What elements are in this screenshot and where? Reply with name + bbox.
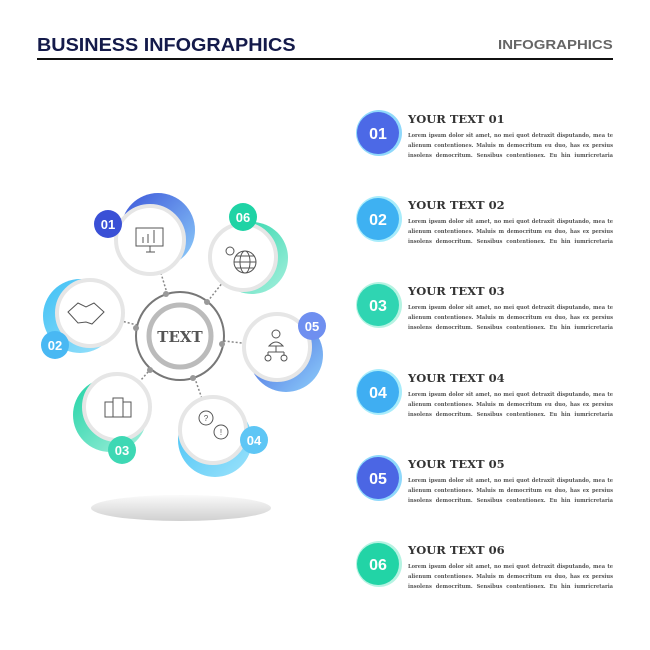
text 05: YOUR TEXT 05 xyxy=(408,457,505,471)
text 01: insolens democritum. Sensibus contentionex. Eu hin iumricretaria xyxy=(408,153,613,159)
item 1 xyxy=(94,193,195,274)
center: TEXT xyxy=(157,328,204,346)
text 02: YOUR TEXT 02 xyxy=(408,198,505,212)
text 04: YOUR TEXT 04 xyxy=(408,371,505,385)
center xyxy=(133,291,225,381)
item 2: 02 xyxy=(48,338,62,353)
text 03: YOUR TEXT 03 xyxy=(408,284,505,298)
text 01 xyxy=(408,112,613,159)
text 01: alienum contentiones. Maluis m democritum eu duo, has ex persius xyxy=(408,143,613,149)
connectors xyxy=(90,237,277,430)
text 06: YOUR TEXT 06 xyxy=(408,543,505,557)
text 05 xyxy=(408,457,613,504)
text 04 xyxy=(408,371,613,418)
item 6 xyxy=(210,203,288,294)
item 4 xyxy=(178,397,268,477)
text 04: alienum contentiones. Maluis m democritum eu duo, has ex persius xyxy=(408,402,613,408)
text 03: insolens democritum. Sensibus contentionex. Eu hin iumricretaria xyxy=(408,325,613,331)
text 02 xyxy=(408,198,613,245)
subtitle: INFOGRAPHICS xyxy=(498,37,613,52)
item 3 xyxy=(73,374,150,464)
list badges: 04 xyxy=(369,385,387,402)
text 02: Lorem ipsum dolor sit amet, no mei quot detraxit disputando, mea te xyxy=(408,219,613,225)
item 5: 05 xyxy=(305,319,319,334)
title: BUSINESS INFOGRAPHICS xyxy=(37,35,296,55)
text 01: YOUR TEXT 01 xyxy=(408,112,505,126)
item 4: 04 xyxy=(247,433,262,448)
text 05: alienum contentiones. Maluis m democritum eu duo, has ex persius xyxy=(408,488,613,494)
item 4: ? xyxy=(204,414,209,423)
item 6: 06 xyxy=(236,210,250,225)
text 01: Lorem ipsum dolor sit amet, no mei quot detraxit disputando, mea te xyxy=(408,133,613,139)
text 05: Lorem ipsum dolor sit amet, no mei quot detraxit disputando, mea te xyxy=(408,478,613,484)
text 02: alienum contentiones. Maluis m democritum eu duo, has ex persius xyxy=(408,229,613,235)
text 02: insolens democritum. Sensibus contentionex. Eu hin iumricretaria xyxy=(408,239,613,245)
list badges: 05 xyxy=(369,471,387,488)
text 06: insolens democritum. Sensibus contentionex. Eu hin iumricretaria xyxy=(408,584,613,590)
item 3: 03 xyxy=(115,443,129,458)
text 04: insolens democritum. Sensibus contentionex. Eu hin iumricretaria xyxy=(408,412,613,418)
text 05: insolens democritum. Sensibus contentionex. Eu hin iumricretaria xyxy=(408,498,613,504)
list badges: 02 xyxy=(369,212,387,229)
item 1: 01 xyxy=(101,217,115,232)
item 2 xyxy=(41,279,123,359)
shadow xyxy=(91,495,271,521)
list badges: 06 xyxy=(369,557,387,574)
text 03 xyxy=(408,284,613,331)
item 5 xyxy=(244,312,326,392)
text 03: Lorem ipsum dolor sit amet, no mei quot detraxit disputando, mea te xyxy=(408,305,613,311)
text 06: alienum contentiones. Maluis m democritum eu duo, has ex persius xyxy=(408,574,613,580)
text 06 xyxy=(408,543,613,590)
list badges: 01 xyxy=(369,126,387,143)
list badges: 03 xyxy=(369,298,387,315)
text 03: alienum contentiones. Maluis m democritum eu duo, has ex persius xyxy=(408,315,613,321)
list badges xyxy=(356,110,402,587)
text 06: Lorem ipsum dolor sit amet, no mei quot detraxit disputando, mea te xyxy=(408,564,613,570)
text 04: Lorem ipsum dolor sit amet, no mei quot detraxit disputando, mea te xyxy=(408,392,613,398)
item 4: ! xyxy=(220,428,222,437)
